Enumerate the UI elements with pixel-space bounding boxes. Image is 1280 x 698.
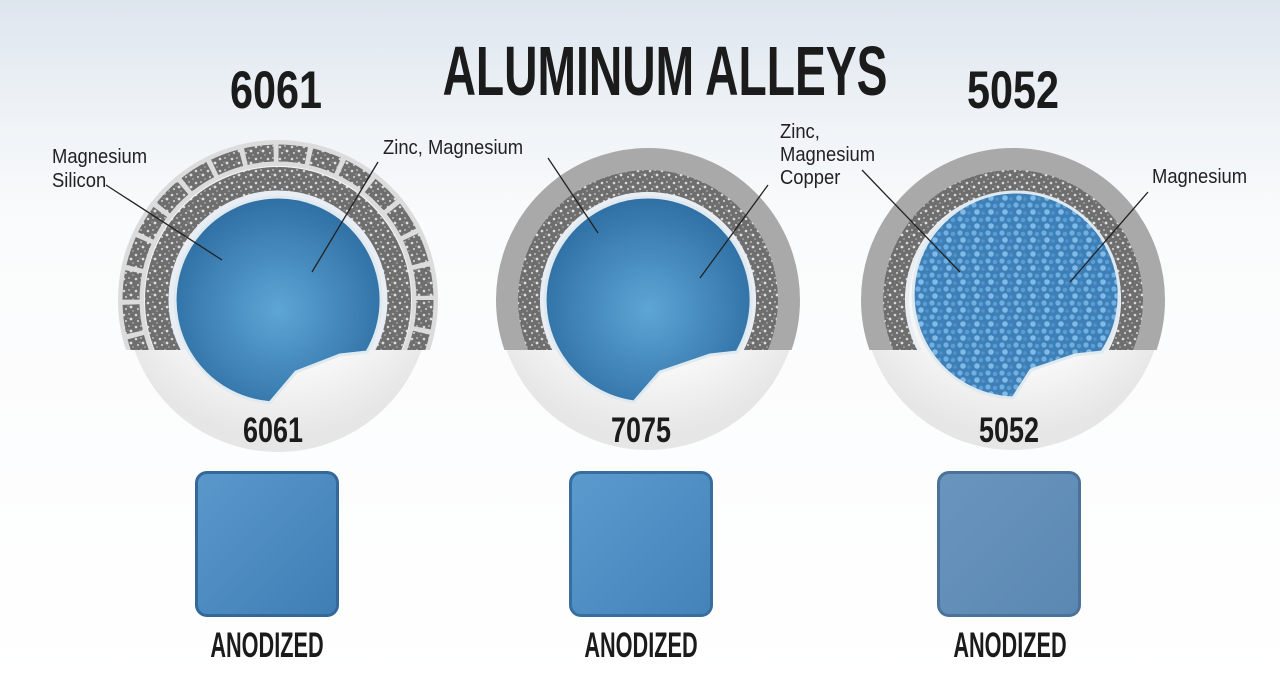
caption anodized 2: ANODIZED <box>584 626 698 665</box>
diagram svg <box>106 140 1165 452</box>
label: magnesium silicon: Silicon <box>52 170 106 192</box>
label: zinc magnesium copper <box>780 121 875 189</box>
panel: 5052 cross-section <box>863 150 1163 450</box>
leader lines <box>106 158 1148 282</box>
alloy number 6061: 6061 <box>243 411 303 450</box>
label: zinc magnesium: Zinc, Magnesium <box>383 137 523 159</box>
swatch 7075 <box>569 471 713 617</box>
alloy number 5052: 5052 <box>979 411 1039 450</box>
heading 5052: 5052 <box>967 61 1059 120</box>
panel: 6061 cross-section <box>126 148 430 452</box>
label: magnesium silicon <box>52 146 147 192</box>
alloy number 7075: 7075 <box>611 411 671 450</box>
caption anodized 1: ANODIZED <box>210 626 324 665</box>
panel: 7075 cross-section <box>498 150 798 450</box>
swatch 6061 <box>195 471 339 617</box>
heading 6061: 6061 <box>230 61 322 120</box>
label: magnesium: Magnesium <box>1152 166 1247 188</box>
label: zinc magnesium copper: Magnesium <box>780 144 875 166</box>
label: zinc magnesium copper: Copper <box>780 167 840 189</box>
label: zinc magnesium copper: Zinc, <box>780 121 820 143</box>
caption anodized 3: ANODIZED <box>953 626 1067 665</box>
swatch 5052 <box>937 471 1081 617</box>
title: ALUMINUM ALLEYS <box>443 32 887 110</box>
label: magnesium silicon: Magnesium <box>52 146 147 168</box>
